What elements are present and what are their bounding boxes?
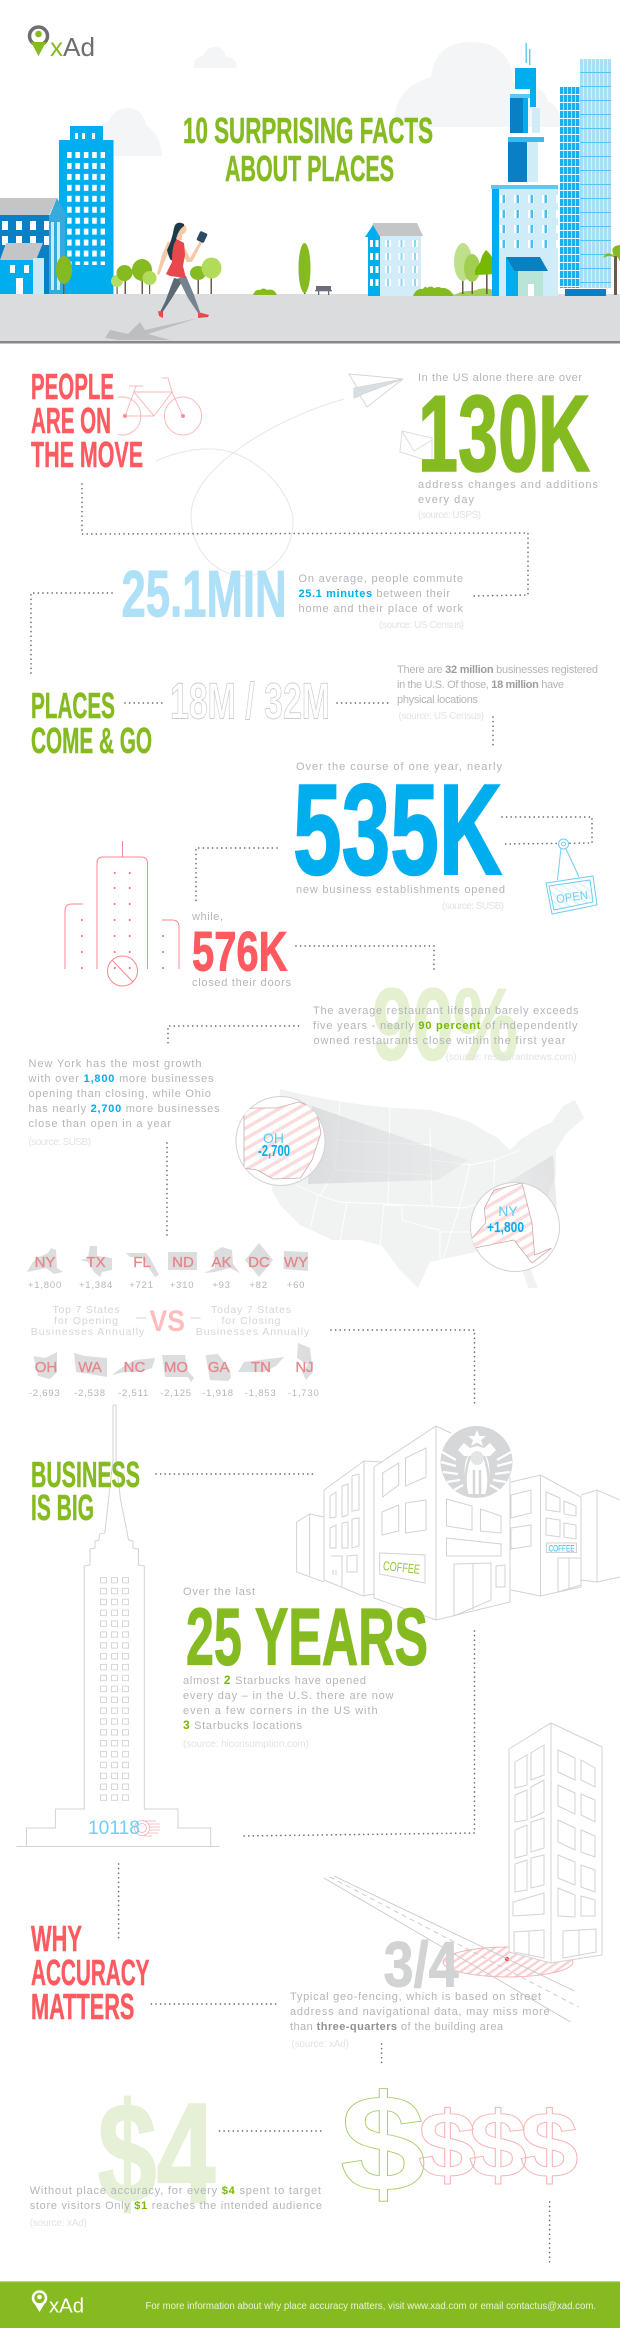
coffee sign green: COFFEE (382, 1558, 421, 1577)
heading: why accuracy matters: MATTERS (31, 1986, 134, 2027)
title: ABOUT PLACES (225, 148, 394, 189)
icon: dollar signs: $ (418, 2092, 476, 2197)
stat: three quarters: address and navigational data, may miss more (290, 2006, 550, 2018)
text: businesses registered: (source: US Census) (398, 711, 484, 722)
callout: New York (470, 1182, 560, 1272)
stat: 535K new businesses: 535K (293, 758, 502, 902)
text: New York vs Ohio: (source: SUSB) (28, 1137, 91, 1148)
icon: dollar signs (340, 2067, 578, 2221)
stat: 90 percent restaurants: owned restaurants close within the first year (314, 1035, 566, 1047)
top 7 closing states row: -1,853 (245, 1388, 276, 1399)
icon: dollar signs: $ (520, 2092, 578, 2197)
text: businesses registered: in the U.S. Of those, 18 million have (397, 679, 564, 691)
top 7 opening states row: ND (172, 1254, 194, 1271)
stat: 535K new businesses: new business establishments opened (296, 884, 505, 896)
text: New York vs Ohio (28, 1058, 220, 1148)
park tree and bench (253, 243, 332, 295)
top 7 closing states row: -2,125 (160, 1388, 192, 1399)
shadow beam from New York (505, 1155, 558, 1225)
callout: New York: NY (498, 1203, 518, 1219)
stat: three quarters: (source: xAd) (291, 2039, 349, 2050)
icon: dollar signs: $ (469, 2092, 527, 2197)
illustration: Starbucks coffee buildings (297, 1426, 620, 1620)
stat: $4 spent: $4 (98, 2074, 216, 2233)
top 7 opening states row: +721 (129, 1280, 154, 1291)
top 7 opening states row: DC (248, 1254, 270, 1271)
top 7 opening states row: +60 (287, 1280, 305, 1291)
walking woman with phone (157, 223, 209, 318)
stat: 535K new businesses: Over the course of one year, nearly (296, 761, 502, 773)
top 7 closing states row: -1,918 (202, 1388, 234, 1399)
stat: 90 percent restaurants: 90% (372, 968, 518, 1082)
top 7 closing states row: NC (124, 1359, 145, 1376)
Starbucks logo (440, 1426, 512, 1498)
callout: New York: +1,800 (487, 1219, 524, 1236)
top 7 closing states row: GA (208, 1359, 230, 1376)
stat: 25 years Starbucks: Over the last (183, 1586, 255, 1598)
stat: 25 years Starbucks: every day – in the U.S. there are now (183, 1690, 394, 1702)
footer logo: xAd (49, 2296, 84, 2318)
ground (0, 294, 620, 341)
top 7 closing states row: -2,511 (118, 1388, 149, 1399)
stat: 130K address changes: (source: USPS) (418, 510, 481, 521)
stat: 576K closed: closed their doors (192, 977, 292, 989)
stat: 25 years Starbucks (183, 1586, 428, 1750)
top 7 closing states row: -2,538 (74, 1388, 106, 1399)
stat: three quarters: Typical geo-fencing, which is based on street (290, 1991, 541, 2003)
stat: $4 spent (30, 2074, 322, 2233)
text: New York vs Ohio: opening than closing, while Ohio (28, 1088, 211, 1100)
stat: 130K address changes: In the US alone there are over (418, 372, 582, 384)
xAd logo (30, 27, 95, 62)
heading: places come and go: PLACES (31, 685, 115, 726)
title (183, 110, 433, 189)
text: New York vs Ohio: New York has the most growth (28, 1058, 202, 1070)
heading: places come and go (31, 685, 152, 761)
stat: $4 spent: store visitors Only $1 reaches the intended audience (30, 2200, 322, 2212)
coffee sign green (380, 1553, 425, 1583)
windows (330, 1448, 581, 1616)
heading: business is big: BUSINESS (31, 1454, 140, 1495)
top 7 closing states row: NJ (295, 1359, 314, 1376)
road map with geo-fence (324, 1876, 578, 2022)
top 7 opening states row: NY (35, 1254, 55, 1271)
stat: 25.1 minute commute: On average, people commute (298, 573, 463, 585)
footer logo (33, 2292, 84, 2318)
top 7 opening states row: +93 (212, 1280, 231, 1291)
dotted connector (31, 593, 112, 673)
stat: 25.1 minute commute: (source: US Census) (379, 620, 464, 631)
callout: Ohio: -2,700 (258, 1143, 290, 1160)
stat: $4 spent: Without place accuracy, for every $4 spent to target (30, 2185, 321, 2197)
top 7 opening states row: +1,384 (79, 1280, 113, 1291)
icon: dollar signs: $ (340, 2067, 426, 2221)
stat: 90 percent restaurants: (source: restaurantnews.com) (446, 1052, 577, 1063)
icon: open sign (546, 839, 597, 914)
text: businesses registered: There are 32 million businesses registered (397, 664, 598, 676)
top 7 opening states row: +1,800 (28, 1280, 62, 1291)
palm tree (603, 245, 620, 295)
stat: 130K address changes: every day (418, 494, 474, 506)
stat: 25.1 minute commute: home and their place of work (298, 603, 464, 615)
stat: three quarters (290, 1928, 550, 2050)
coffee sign blue (546, 1543, 576, 1554)
icon: Empire State building (17, 1405, 219, 1846)
small house (0, 243, 44, 294)
top 7 opening states row: WY (284, 1254, 308, 1271)
dotted connectors (125, 703, 493, 748)
stat: $4 spent: (source: xAd) (30, 2218, 87, 2229)
top 7 closing states row (29, 1343, 320, 1399)
paper plane flight path (156, 399, 344, 576)
top 7 closing states row: TN (251, 1359, 271, 1376)
text: businesses registered (397, 664, 598, 722)
callout: Ohio (236, 1096, 325, 1186)
stat: 535K new businesses: (source: SUSB) (442, 901, 504, 912)
stat: three quarters: than three-quarters of the building area (290, 2021, 504, 2033)
top 7 opening states row: FL (133, 1254, 151, 1271)
top 7 closing states row: OH (35, 1359, 57, 1376)
dotted connector (296, 946, 434, 971)
stat: 576K closed: while, (191, 911, 223, 923)
trees left (56, 256, 222, 294)
heading: business is big (31, 1454, 140, 1528)
dotted connectors (156, 1330, 474, 1474)
glass tower (560, 59, 611, 296)
text: New York vs Ohio: close than open in a year (28, 1118, 171, 1130)
callout: Ohio: OH (263, 1130, 284, 1146)
top 7 opening states row: TX (86, 1254, 106, 1271)
top 7 closing states row: -1,730 (288, 1388, 320, 1399)
dotted connector (82, 484, 528, 596)
icon: open sign: OPEN (555, 888, 589, 906)
stat: three quarters: 3/4 (384, 1928, 459, 2000)
comparison labels: VS: VS (150, 1305, 185, 1338)
top 7 opening states row: AK (211, 1254, 232, 1271)
comparison labels: VS: Today 7 States (211, 1304, 291, 1316)
stat: 25 years Starbucks: 25 YEARS (186, 1592, 428, 1682)
comparison labels: VS: Top 7 States (52, 1304, 120, 1316)
heading: people are on the move: THE MOVE (31, 434, 143, 475)
heading: people are on the move: PEOPLE (31, 366, 114, 407)
heading: places come and go: COME & GO (31, 720, 152, 761)
comparison labels: VS: Businesses Annually (196, 1326, 310, 1338)
dotted connectors (167, 1026, 298, 1235)
top 7 opening states row (27, 1243, 308, 1291)
clouds (89, 42, 561, 156)
text: New York vs Ohio: has nearly 2,700 more businesses (28, 1103, 220, 1115)
comparison labels: VS: for Opening (54, 1315, 118, 1327)
left tall building (59, 126, 114, 294)
icon: envelope (400, 431, 432, 462)
middle house (365, 223, 423, 296)
stat: 25 years Starbucks: (source: hiconsumption.com) (183, 1739, 309, 1750)
icon: closed building (65, 841, 179, 986)
heading: why accuracy matters: ACCURACY (31, 1952, 150, 1993)
zip code postmark: 10118 (88, 1818, 140, 1839)
US map (272, 1089, 584, 1288)
illustration: corner building (509, 1723, 602, 1963)
dotted connectors (196, 817, 592, 902)
heading: why accuracy matters: WHY (31, 1918, 82, 1959)
shadow beam from Ohio (308, 1106, 468, 1184)
heading: why accuracy matters (31, 1918, 150, 2027)
left front building (0, 198, 68, 294)
right tower (491, 43, 558, 296)
stat: 25 years Starbucks: 3 Starbucks locations (183, 1718, 302, 1732)
stat: 90 percent restaurants: The average restaurant lifespan barely exceeds (313, 1005, 579, 1017)
heading: business is big: IS BIG (31, 1487, 94, 1528)
stat: 130K address changes: address changes and additions (418, 479, 598, 491)
top 7 opening states row: +82 (249, 1280, 268, 1291)
stat: 535K new businesses (293, 758, 505, 912)
stat: 25.1 minute commute: 25.1MIN (122, 556, 286, 630)
stat: 576K closed: 576K (192, 920, 288, 982)
bushes and trees right (413, 243, 498, 296)
stat: 18M of 32M outline number: 18M / 32M (170, 672, 330, 730)
xAd logo: xAd (50, 32, 95, 62)
coffee sign blue: COFFEE (548, 1544, 574, 1554)
icon: bicycle (118, 378, 202, 435)
icon: paper plane (349, 374, 403, 407)
top 7 opening states row: +310 (170, 1280, 194, 1291)
heading: people are on the move: ARE ON (31, 400, 111, 441)
top 7 closing states row: -2,693 (29, 1388, 61, 1399)
text: businesses registered: physical locations (397, 694, 478, 706)
title: 10 SURPRISING FACTS (183, 110, 433, 151)
top 7 closing states row: MO (164, 1359, 188, 1376)
comparison labels: VS (31, 1304, 310, 1338)
footer bar (0, 2281, 620, 2328)
stat: 576K closed (191, 911, 292, 989)
top 7 closing states row: WA (78, 1359, 102, 1376)
far buildings (297, 1426, 620, 1620)
header city scene (0, 42, 620, 344)
stat: 25.1 minute commute: 25.1 minutes between their (298, 588, 450, 600)
stat: 25 years Starbucks: even a few corners in the US with (183, 1705, 378, 1717)
shadow of walker (105, 318, 198, 340)
comparison labels: VS: for Closing (222, 1315, 281, 1327)
stat: 25 years Starbucks: almost 2 Starbucks have opened (183, 1673, 366, 1687)
comparison labels: VS: Businesses Annually (31, 1326, 145, 1338)
text: New York vs Ohio: with over 1,800 more businesses (28, 1073, 214, 1085)
heading: people are on the move (31, 366, 143, 475)
dotted connectors (119, 1631, 474, 1939)
dotted connectors (151, 2004, 550, 2263)
stat: 90 percent restaurants: five years - nearly 90 percent of independently (313, 1020, 578, 1032)
